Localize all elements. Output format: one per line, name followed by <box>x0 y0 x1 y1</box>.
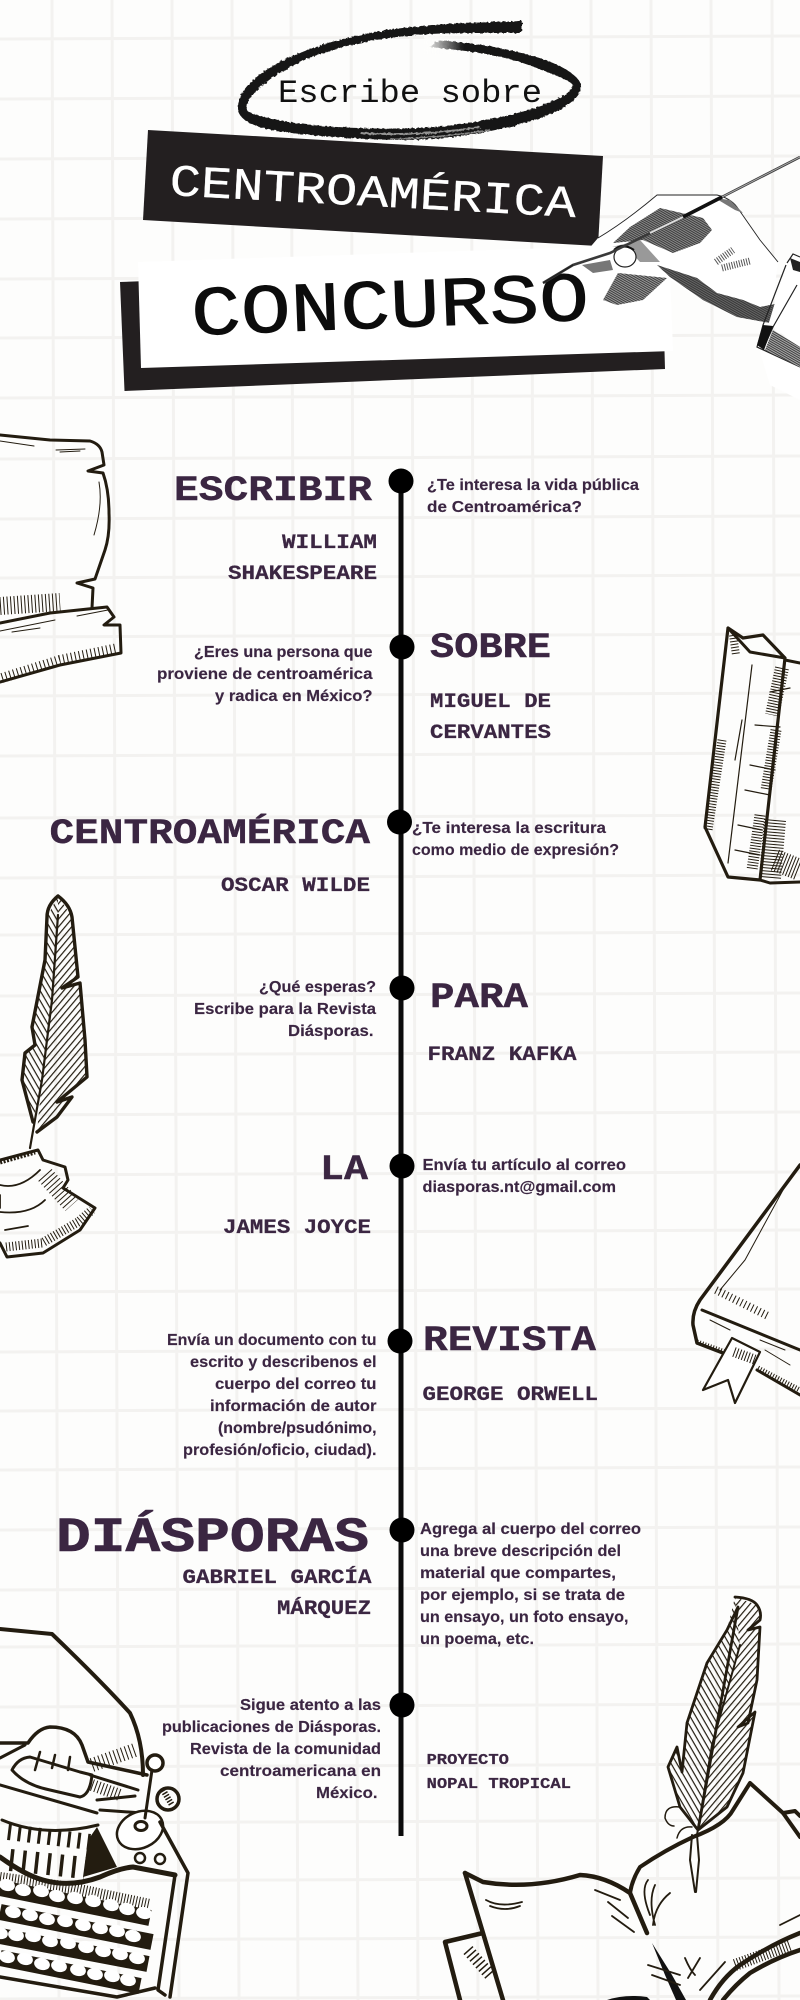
question: Diásporas. <box>288 1023 374 1040</box>
black backing strip <box>120 262 665 391</box>
step 1: Escribir <box>174 468 639 586</box>
icon: quill feather <box>665 1597 761 1892</box>
icon: open book <box>445 1783 800 2000</box>
author: FRANZ KAFKA <box>428 1044 576 1067</box>
author: OSCAR WILDE <box>221 875 370 898</box>
instruction: material que compartes, <box>420 1565 616 1582</box>
banner heading: Centroamérica: CENTROAMÉRICA <box>168 158 577 231</box>
platen knobs <box>111 1755 179 1864</box>
timeline dot <box>388 1328 412 1354</box>
timeline dot <box>390 1154 414 1178</box>
timeline dot <box>388 468 414 494</box>
instruction: cuerpo del correo tu <box>215 1376 376 1393</box>
question: como medio de expresión? <box>412 842 619 859</box>
instruction: Envía tu artículo al correo <box>422 1157 626 1174</box>
instruction: Agrega al cuerpo del correo <box>420 1521 641 1538</box>
author: GABRIEL GARCÍA <box>182 1566 372 1590</box>
icon: closed book with ribbon <box>693 1165 800 1403</box>
question <box>194 979 376 1040</box>
credit: Proyecto Nopal Tropical <box>426 1752 571 1793</box>
finger shading <box>603 273 667 305</box>
keyword: DIÁSPORAS <box>56 1510 369 1566</box>
icon: feather in ink bottle <box>0 896 95 1257</box>
cuff <box>757 254 800 400</box>
instruction: un ensayo, un foto ensayo, <box>420 1609 628 1626</box>
icon: hand with pen <box>543 157 800 400</box>
author: JAMES JOYCE <box>223 1217 371 1240</box>
carriage and type head <box>0 1727 147 1813</box>
question: ¿Te interesa la vida pública <box>427 477 639 494</box>
author <box>228 532 377 586</box>
instruction: Envía un documento con tu <box>167 1332 376 1349</box>
instruction: información de autor <box>210 1398 376 1415</box>
keyword: ESCRIBIR <box>174 471 372 511</box>
question: ¿Eres una persona que <box>194 644 373 661</box>
keyword: SOBRE <box>430 628 551 668</box>
timeline dot <box>387 810 412 834</box>
timeline axis <box>398 481 404 1836</box>
instruction: (nombre/psudónimo, <box>218 1420 376 1437</box>
author: MIGUEL DE <box>430 691 551 714</box>
question <box>412 820 619 859</box>
closing text: publicaciones de Diásporas. <box>162 1719 381 1736</box>
author: GEORGE ORWELL <box>422 1384 598 1407</box>
instruction: escrito y describenos el <box>190 1354 376 1371</box>
step 6: Revista <box>167 1321 598 1459</box>
keyword: CENTROAMÉRICA <box>50 813 370 854</box>
credit: Proyecto Nopal Tropical: NOPAL TROPICAL <box>426 1776 571 1793</box>
timeline dot <box>390 1692 414 1718</box>
closing text: centroamericana en <box>220 1763 381 1780</box>
step 3: Centroamérica <box>50 810 619 898</box>
keyword: REVISTA <box>423 1321 596 1361</box>
icon: closed books <box>705 628 800 883</box>
pen <box>543 157 800 283</box>
banner heading: Concurso: CONCURSO <box>190 263 591 357</box>
knuckle shading <box>613 208 712 253</box>
instruction: por ejemplo, si se trata de <box>420 1587 625 1604</box>
text: Escribe sobre: Escribe sobre <box>278 75 542 112</box>
question: ¿Qué esperas? <box>259 979 376 996</box>
author: SHAKESPEARE <box>228 563 377 586</box>
question: ¿Te interesa la escritura <box>412 820 606 837</box>
instruction: un poema, etc. <box>420 1631 534 1648</box>
brush circle <box>237 21 581 140</box>
hood <box>0 1629 143 1775</box>
type bars <box>0 1820 175 1883</box>
author: MÁRQUEZ <box>277 1597 371 1621</box>
question: proviene de centroamérica <box>157 666 373 683</box>
author <box>430 691 551 745</box>
timeline dot <box>390 976 414 1000</box>
author: CERVANTES <box>430 722 551 745</box>
title block <box>120 21 673 391</box>
question <box>157 644 373 705</box>
thumb nail <box>614 247 636 267</box>
instruction <box>420 1521 641 1648</box>
instruction: profesión/oficio, ciudad). <box>183 1442 376 1459</box>
step 2: Sobre <box>157 628 551 745</box>
timeline dot <box>390 634 414 660</box>
closing text <box>162 1697 381 1802</box>
instruction: una breve descripción del <box>420 1543 621 1560</box>
closing text: México. <box>316 1785 378 1802</box>
step 8: closing note <box>162 1692 571 1802</box>
keyboard <box>0 1877 153 1988</box>
closing text: Sigue atento a las <box>240 1697 381 1714</box>
black banner <box>143 130 603 246</box>
timeline dot <box>390 1518 414 1542</box>
icon: parchment scroll <box>0 435 121 682</box>
instruction <box>167 1332 376 1459</box>
credit: Proyecto Nopal Tropical: PROYECTO <box>426 1752 509 1769</box>
step 5: La <box>223 1150 626 1240</box>
white banner <box>138 244 673 368</box>
step 7: Diásporas <box>56 1510 641 1648</box>
wrist shading <box>657 265 780 323</box>
instruction <box>422 1157 626 1196</box>
step 4: Para <box>194 976 576 1067</box>
question: de Centroamérica? <box>427 499 582 516</box>
keyword: PARA <box>430 978 528 1018</box>
author <box>182 1566 372 1621</box>
icon: typewriter <box>0 1629 188 1997</box>
machine body <box>0 1822 188 1997</box>
keyword: LA <box>320 1150 368 1190</box>
author: WILLIAM <box>282 532 377 555</box>
question: Escribe para la Revista <box>194 1001 376 1018</box>
question: y radica en México? <box>215 688 372 705</box>
question <box>427 477 639 516</box>
closing text: Revista de la comunidad <box>190 1741 381 1758</box>
instruction: diasporas.nt@gmail.com <box>422 1179 616 1196</box>
